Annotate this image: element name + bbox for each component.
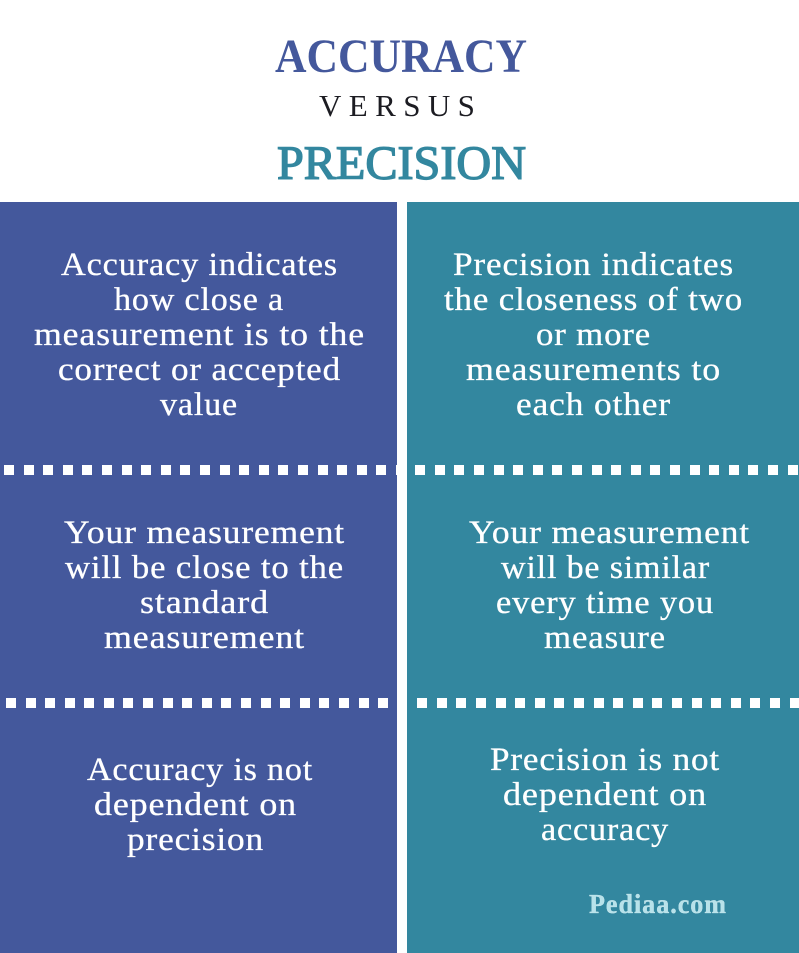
accuracy point 2: measurement — [104, 620, 305, 656]
precision point 2: measure — [544, 620, 666, 656]
precision point 1: measurements to — [466, 352, 721, 388]
precision point 1: the closeness of two — [444, 282, 743, 318]
accuracy point 3: Accuracy is not — [87, 752, 313, 788]
accuracy point 3 — [87, 752, 313, 858]
precision point 3: accuracy — [541, 812, 669, 848]
panel: precision column — [407, 202, 799, 953]
accuracy point 1: value — [160, 387, 238, 423]
panel: accuracy column — [0, 202, 397, 953]
precision point 3: dependent on — [503, 777, 707, 813]
precision point 2: every time you — [496, 585, 714, 621]
precision point 3 — [490, 742, 720, 848]
accuracy point 1: measurement is to the — [34, 317, 365, 353]
accuracy point 2: will be close to the — [65, 550, 344, 586]
precision point 3: Precision is not — [490, 742, 720, 778]
accuracy point 1: correct or accepted — [58, 352, 341, 388]
logo: Pediaa.com: Pediaa.com — [589, 889, 727, 919]
accuracy point 2 — [64, 515, 345, 656]
precision point 1 — [444, 247, 743, 423]
accuracy point 1: how close a — [114, 282, 284, 318]
precision point 1: or more — [536, 317, 651, 353]
accuracy point 1 — [34, 247, 365, 423]
title block — [275, 30, 527, 190]
precision point 2 — [469, 515, 750, 656]
precision point 2: will be similar — [501, 550, 710, 586]
accuracy point 2: standard — [140, 585, 269, 621]
accuracy point 1: Accuracy indicates — [61, 247, 338, 283]
precision point 2: Your measurement — [469, 515, 750, 551]
accuracy point 3: dependent on — [94, 787, 297, 823]
subtitle: versus: VERSUS — [319, 88, 482, 123]
title: precision: PRECISION — [277, 137, 526, 190]
precision point 1: each other — [516, 387, 671, 423]
title: accuracy: ACCURACY — [275, 30, 527, 83]
accuracy point 2: Your measurement — [64, 515, 345, 551]
accuracy point 3: precision — [127, 822, 264, 858]
precision point 1: Precision indicates — [453, 247, 734, 283]
